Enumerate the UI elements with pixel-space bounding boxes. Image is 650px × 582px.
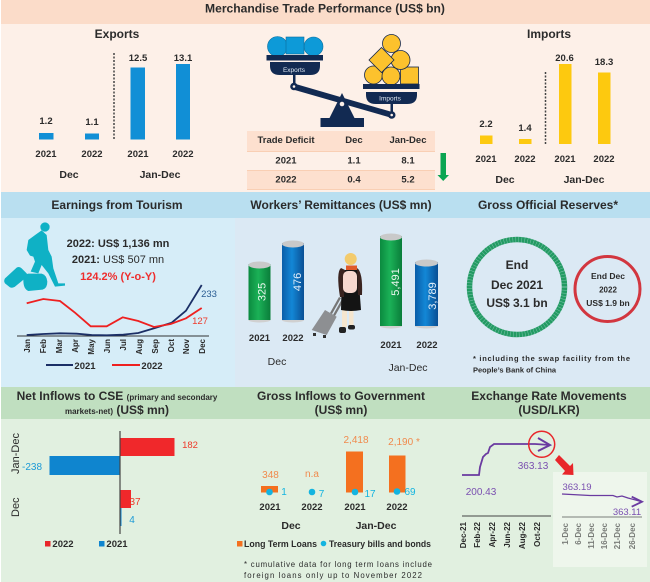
- panel: reserves: [470, 240, 640, 374]
- remittances axis labels: 2021: [249, 333, 271, 344]
- tourism totals: 2022: US$ 1,136 mn: [67, 238, 170, 250]
- exports value labels: 12.5: [129, 53, 148, 64]
- services header band: [1, 192, 650, 218]
- heading: exchange rate movements: [471, 389, 627, 417]
- government axis labels: 2021: [344, 502, 366, 513]
- inset chart: [561, 482, 642, 549]
- main axis: Aug-22: [518, 521, 527, 549]
- reserves circle 2021: Dec 2021: [491, 278, 543, 292]
- panel: CSE bar chart: -238: [22, 462, 42, 473]
- tourism legend: 2022: [141, 361, 163, 372]
- panel: CSE bar chart: Dec: [10, 497, 22, 517]
- tourism totals: [67, 238, 170, 283]
- heading: net inflows to CSE: markets-net) (US$ mn): [65, 403, 169, 417]
- cylinder: Jan-Dec 2021: 5,491: [390, 268, 402, 296]
- heading: gross inflows to government: [257, 389, 425, 417]
- tourism month labels: Jan: [23, 339, 32, 353]
- heading: earnings from tourism: Earnings from Tourism: [51, 198, 183, 212]
- remittances axis labels: [249, 333, 438, 374]
- main axis: [459, 516, 551, 549]
- remittances axis labels: 2021: [380, 340, 402, 351]
- main axis: Feb-22: [473, 521, 482, 548]
- remittances axis labels: Jan-Dec: [388, 362, 428, 374]
- tourism month labels: Apr: [71, 339, 80, 353]
- cylinder: Jan-Dec 2021: [380, 234, 402, 328]
- arrow: zoom pointer: [555, 455, 574, 475]
- heading: gross inflows to government: (US$ mn): [315, 403, 367, 417]
- government axis labels: Dec: [281, 520, 301, 532]
- table: trade deficit: 2022: [275, 174, 297, 186]
- table: trade deficit: 0.4: [347, 174, 361, 186]
- inset background: [553, 472, 647, 567]
- inset chart: 1-Dec: [561, 522, 570, 545]
- government loan values: 348: [262, 470, 279, 481]
- government footnote: foreign loans only up to November 2022: [244, 571, 422, 580]
- tourism month labels: Aug: [135, 339, 144, 355]
- panel: government inflows chart: [237, 435, 432, 580]
- inset chart: 363.11: [613, 507, 641, 518]
- inset chart: 6-Dec: [574, 522, 583, 545]
- exports axis labels: 2022: [172, 149, 194, 160]
- government treasury values: 17: [364, 489, 376, 500]
- remittances axis labels: 2022: [416, 340, 438, 351]
- reserves circle 2022: End Dec: [591, 271, 625, 281]
- table: trade deficit: [247, 131, 435, 190]
- government loan values: 2,418: [343, 435, 369, 446]
- imports axis labels: Dec: [495, 174, 515, 186]
- CSE legend: [45, 539, 128, 550]
- government treasury values: 69: [404, 487, 416, 498]
- tourism month labels: [23, 338, 207, 355]
- table: trade deficit: Jan-Dec: [390, 135, 426, 146]
- arrow: deficit falling: [438, 153, 449, 181]
- panel: CSE bar chart: [10, 431, 198, 550]
- reserves footnote: * including the swap facility from the: [473, 354, 630, 363]
- panel: CSE bar chart: 182: [182, 440, 198, 451]
- panel: merchandise trade background: [1, 24, 650, 192]
- reserves footnote: People’s Bank of China: [473, 366, 557, 374]
- exports axis labels: Jan-Dec: [140, 169, 181, 181]
- highlight circle: [529, 431, 555, 457]
- exports value labels: 13.1: [174, 53, 193, 64]
- government axis labels: [259, 502, 408, 532]
- government footnote: [244, 560, 432, 580]
- tourism month labels: May: [87, 338, 96, 355]
- imports axis labels: 2021: [475, 154, 497, 165]
- imports value labels: [479, 53, 613, 134]
- panel: remittances: [248, 234, 439, 374]
- government legend: Treasury bills and bonds: [329, 539, 431, 549]
- imports axis labels: 2022: [593, 154, 615, 165]
- heading: exports: Exports: [95, 27, 140, 41]
- tourism month labels: Jun: [103, 339, 112, 353]
- imports bars: [480, 64, 610, 144]
- inset chart: 26-Dec: [628, 522, 637, 549]
- main axis: Dec-21: [459, 521, 468, 548]
- government treasury values: [281, 487, 416, 500]
- exports axis labels: 2022: [81, 149, 103, 160]
- government axis labels: 2022: [301, 502, 323, 513]
- table: trade deficit: Dec: [345, 135, 363, 146]
- panel: CSE bar chart: Jan-Dec: [10, 433, 22, 474]
- tourism legend: [46, 361, 163, 372]
- reserves footnote: [473, 354, 630, 374]
- cylinder: Jan-Dec 2022: 3,789: [427, 282, 439, 310]
- government treasury values: 1: [281, 487, 287, 498]
- tourism month labels: Oct: [167, 339, 176, 352]
- main rate line: [462, 444, 550, 475]
- tourism month labels: Sep: [151, 339, 160, 354]
- CSE legend: 2021: [106, 539, 128, 550]
- reserves circle 2021: [470, 240, 564, 334]
- inset chart: 11-Dec: [587, 522, 596, 549]
- exports axis labels: 2021: [127, 149, 149, 160]
- reserves circle 2022: US$ 1.9 bn: [586, 298, 630, 308]
- rate labels: [466, 461, 549, 498]
- heading: net inflows to CSE: [17, 389, 218, 417]
- main axis: Jun-22: [503, 521, 512, 548]
- panel: exports: [35, 27, 194, 181]
- imports axis labels: [475, 154, 615, 186]
- exports value labels: 1.2: [39, 116, 53, 127]
- heading: workers remittances: Workers’ Remittances (US$ mn): [250, 198, 432, 212]
- tourism month labels: Mar: [55, 339, 64, 353]
- cylinder: Dec 2021: 325: [256, 283, 268, 301]
- panel: CSE bar chart: 37: [129, 497, 141, 508]
- inset chart: 21-Dec: [613, 522, 622, 549]
- exports bars: [39, 64, 190, 140]
- tourism month labels: Nov: [182, 338, 191, 354]
- tourism line chart: 233: [201, 289, 217, 300]
- panel: imports: [475, 27, 615, 186]
- icon: traveller silhouette: [4, 222, 65, 291]
- reserves circle 2021: End: [506, 258, 528, 272]
- heading: imports: Imports: [527, 27, 571, 41]
- government axis labels: 2022: [386, 502, 408, 513]
- imports axis labels: 2022: [514, 154, 536, 165]
- tourism month labels: Feb: [39, 339, 48, 353]
- imports axis labels: Jan-Dec: [564, 174, 605, 186]
- export goods: [268, 36, 323, 56]
- government loan values: 2,190 *: [388, 437, 420, 448]
- table: trade deficit: 8.1: [401, 156, 415, 166]
- inflows header band: [1, 387, 650, 419]
- scale frame: [266, 55, 420, 127]
- table: trade deficit: 5.2: [401, 174, 415, 186]
- title band: [1, 0, 650, 24]
- exports value labels: [39, 53, 193, 128]
- title: Merchandise Trade Performance (US$ bn): [205, 2, 445, 16]
- exports value labels: 1.1: [85, 117, 99, 128]
- reserves circle 2022: 2022: [599, 286, 617, 294]
- tourism totals: 124.2% (Y-o-Y): [80, 271, 156, 283]
- government legend: [237, 539, 431, 549]
- cylinder: Dec 2022: [282, 240, 304, 322]
- icon: balance scale: Imports: [379, 96, 402, 102]
- reserves circle 2022: [575, 256, 640, 322]
- icon: traveller with suitcase: [312, 253, 362, 338]
- inset chart: 363.19: [562, 482, 592, 493]
- tourism totals: 2021: US$ 507 mn: [72, 254, 164, 266]
- exports axis labels: [35, 149, 194, 181]
- rate labels: 200.43: [466, 487, 497, 498]
- panel: exchange rate chart: [459, 431, 647, 567]
- government axis labels: 2021: [259, 502, 281, 513]
- table: trade deficit: 2021: [275, 156, 297, 166]
- reserves circle 2021: US$ 3.1 bn: [486, 296, 548, 310]
- heading: exchange rate movements: (USD/LKR): [518, 403, 580, 417]
- imports value labels: 2.2: [479, 119, 493, 130]
- panel: tourism: [4, 222, 217, 372]
- government treasury values: 7: [319, 489, 325, 500]
- heading: net inflows to CSE: Net Inflows to CSE (primary and secondary: [17, 389, 218, 403]
- panel: services band background: [1, 192, 650, 387]
- tourism line chart: [17, 285, 217, 336]
- icon: balance scale: [266, 34, 420, 127]
- imports axis labels: 2021: [554, 154, 576, 165]
- heading: exchange rate movements: Exchange Rate Movements: [471, 389, 627, 403]
- imports value labels: 1.4: [518, 123, 532, 134]
- imports value labels: 20.6: [555, 53, 574, 64]
- panel: inflows band background: [1, 387, 650, 582]
- government footnote: * cumulative data for long term loans include: [244, 560, 432, 569]
- inset chart: 16-Dec: [600, 522, 609, 549]
- tourism month labels: Dec: [198, 338, 207, 354]
- import goods: [364, 34, 418, 85]
- remittances axis labels: 2022: [282, 333, 304, 344]
- tourism line chart: 127: [192, 316, 208, 327]
- remittances axis labels: Dec: [268, 356, 286, 368]
- government axis labels: Jan-Dec: [356, 520, 397, 532]
- government loan values: n.a: [305, 469, 319, 480]
- tourism month labels: Jul: [119, 339, 128, 351]
- CSE legend: 2022: [52, 539, 74, 550]
- cylinder: Dec 2022: 476: [292, 273, 304, 291]
- table: trade deficit: Trade Deficit: [257, 135, 315, 146]
- imports value labels: 18.3: [595, 57, 613, 68]
- cylinder: Jan-Dec 2022: [415, 260, 439, 328]
- tourism legend: 2021: [74, 361, 96, 372]
- exports axis labels: 2021: [35, 149, 57, 160]
- government legend: Long Term Loans: [244, 539, 317, 549]
- main axis: Oct-22: [533, 521, 542, 547]
- exports axis labels: Dec: [59, 169, 79, 181]
- icon: balance scale: Exports: [283, 67, 306, 74]
- panel: CSE bar chart: 4: [129, 515, 135, 526]
- main axis: Apr-22: [488, 521, 497, 547]
- table: trade deficit: 1.1: [347, 156, 361, 166]
- heading: gross inflows to government: Gross Inflows to Government: [257, 389, 425, 403]
- cylinder: Dec 2021: [248, 262, 270, 322]
- heading: gross official reserves: Gross Official Reserves*: [478, 198, 618, 212]
- rate labels: 363.13: [518, 461, 549, 472]
- government loan values: [262, 435, 420, 481]
